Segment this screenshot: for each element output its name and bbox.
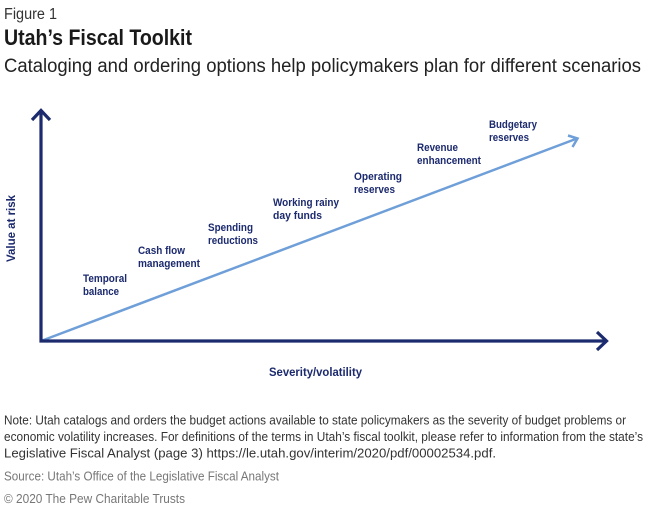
chart	[6, 110, 606, 379]
label: spending reductions: reductions	[208, 235, 258, 247]
y axis label: Value at risk	[6, 194, 18, 262]
label: revenue enhancement	[417, 142, 481, 167]
label: spending reductions	[208, 222, 258, 247]
note: Legislative Fiscal Analyst (page 3) https://le.utah.gov/interim/2020/pdf/00002534.pdf.	[4, 446, 496, 460]
label: working rainy day funds: day funds	[273, 210, 322, 222]
label: spending reductions: Spending	[208, 222, 253, 234]
label: temporal balance: balance	[83, 286, 119, 298]
label: operating reserves: reserves	[354, 184, 395, 196]
label: working rainy day funds	[273, 197, 340, 222]
label: revenue enhancement: Revenue	[417, 142, 458, 154]
label: temporal balance: Temporal	[83, 273, 127, 285]
source: Source: Utah’s Office of the Legislative Fiscal Analyst	[4, 470, 279, 484]
title: Utah’s Fiscal Toolkit	[4, 25, 193, 50]
x axis label: Severity/volatility	[269, 365, 362, 379]
x axis arrow	[40, 332, 606, 350]
label: revenue enhancement: enhancement	[417, 155, 481, 167]
note	[4, 414, 643, 460]
label: cash flow management	[138, 245, 200, 270]
label: cash flow management: management	[138, 258, 200, 270]
label: cash flow management: Cash flow	[138, 245, 185, 257]
label: budgetary reserves: reserves	[489, 132, 529, 144]
label: operating reserves: Operating	[354, 171, 402, 183]
label: working rainy day funds: Working rainy	[273, 197, 340, 209]
figure label: Figure 1	[4, 6, 57, 23]
subtitle: Cataloging and ordering options help policymakers plan for different scenarios	[4, 56, 641, 77]
label: operating reserves	[354, 171, 402, 196]
note: Note: Utah catalogs and orders the budget actions available to state policymakers as the severity of budget problems or	[4, 414, 626, 428]
copyright: © 2020 The Pew Charitable Trusts	[4, 492, 185, 506]
trend arrow	[41, 136, 578, 341]
label: temporal balance	[83, 273, 127, 298]
label: budgetary reserves	[489, 119, 538, 144]
label: budgetary reserves: Budgetary	[489, 119, 538, 131]
y axis arrow	[32, 110, 50, 342]
